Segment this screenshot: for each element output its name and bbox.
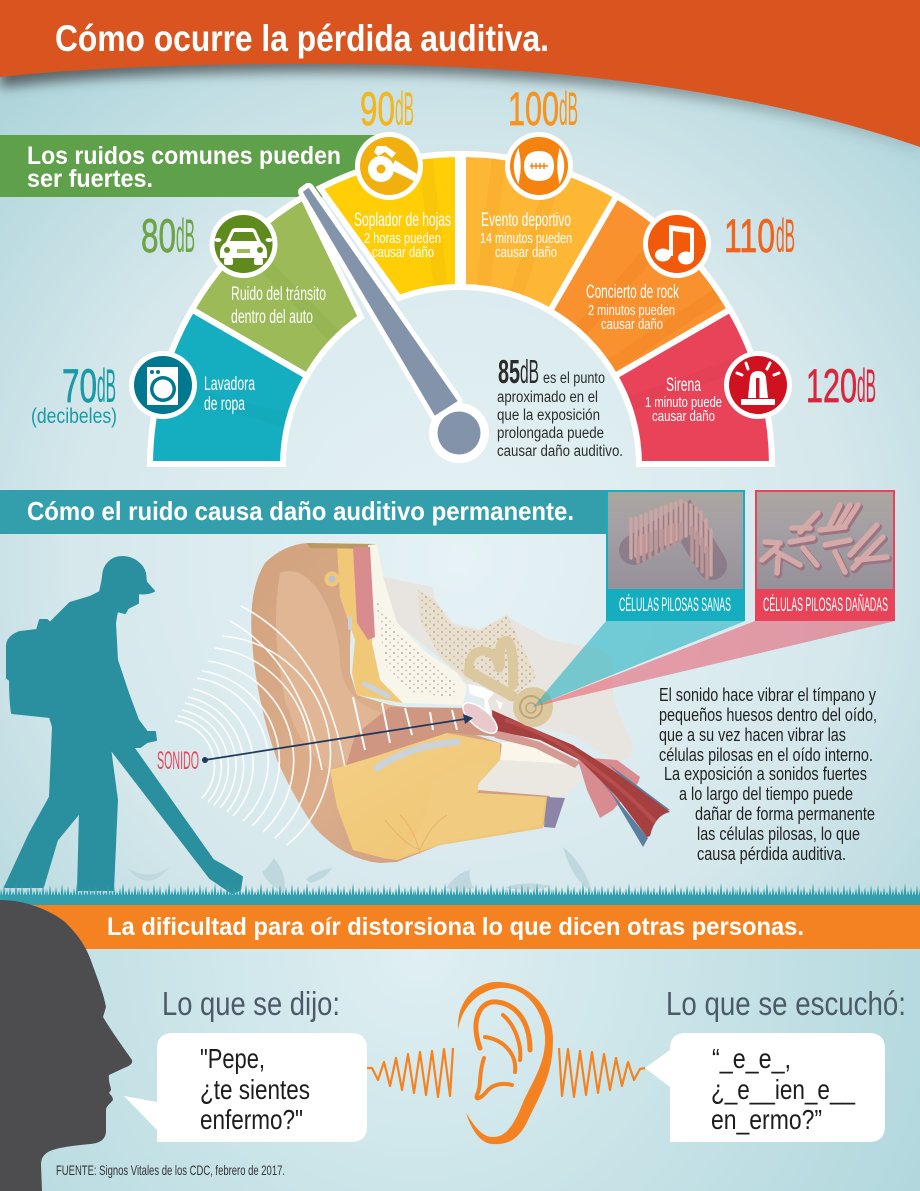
gauge (150, 150, 772, 465)
ear: pink tissue (577, 757, 640, 818)
label: rock concert: 2 minutos pueden (588, 303, 675, 319)
section heading: hearing difficulty (0, 905, 920, 949)
explanatory text: causa pérdida auditiva. (697, 844, 846, 864)
110 dB label: 110 (724, 209, 775, 262)
segment labels (204, 210, 722, 425)
panel: damaged hair cells (755, 490, 895, 621)
source note: FUENTE: Signos Vitales de los CDC, febrero de 2017. (56, 1162, 285, 1178)
ear: outer tan body (251, 543, 550, 863)
label: siren: 1 minuto puede (645, 395, 722, 411)
85 dB note: que la exposición (497, 407, 600, 424)
zoom beam: healthy cells (533, 621, 745, 707)
ear: yellow cartilage strip (337, 546, 403, 703)
segment 120 dB (615, 310, 772, 464)
dB labels: dB (776, 209, 795, 262)
segment 90 dB (320, 154, 458, 298)
ear: eardrum (458, 698, 502, 738)
dB labels: dB (395, 82, 414, 135)
label: leaf blower: Soplador de hojas (354, 210, 451, 231)
explanatory text: células pilosas en el oído interno. (659, 745, 873, 765)
ear: spongy bone (418, 590, 537, 693)
ear: grey cartilage (377, 742, 457, 768)
explanatory text: que a su vez hacen vibrar las (659, 725, 846, 745)
section heading: common noises: ser fuertes. (27, 165, 153, 193)
85 dB note: 85 (498, 353, 520, 390)
segment 80 dB (192, 197, 361, 376)
ear: ossicles (468, 684, 503, 717)
faint falling leaves (128, 847, 592, 892)
label: sports event: causar daño (495, 245, 557, 261)
ear: blue vessel (593, 770, 648, 847)
70 dB label (31, 359, 117, 428)
speech bubble: heard (645, 1033, 885, 1142)
label: sports event: 14 minutos pueden (480, 231, 572, 247)
icon: car (210, 210, 278, 278)
label: sports event (480, 210, 572, 261)
explanatory text (659, 685, 877, 864)
80 dB label: 80 (141, 209, 176, 262)
damaged cells bundle (762, 505, 888, 575)
label: traffic: dentro del auto (231, 307, 313, 328)
ear: lower yellow lobe (330, 733, 547, 860)
label: rock concert: Concierto de rock (586, 282, 679, 303)
text: dB (857, 359, 876, 412)
icon: washing machine (129, 351, 197, 419)
section heading: how noise causes damage (0, 490, 606, 534)
label: washer: de ropa (204, 394, 245, 415)
speech bubble: said (124, 1033, 367, 1142)
section heading: common noises (0, 135, 382, 197)
speech bubble: heard: en_ermo?” (711, 1104, 822, 1135)
85 dB note: dB (520, 353, 539, 390)
label: washer (204, 374, 255, 415)
section heading: hearing difficulty: La dificultad para oír distorsiona lo que dicen otras personas. (107, 913, 804, 941)
segment light rays (170, 150, 750, 465)
sound wave left (367, 1048, 453, 1097)
healthy cells bundle (631, 501, 712, 578)
ear: small cartilage ring (324, 572, 340, 586)
label: siren: Sirena (666, 375, 701, 396)
grass (0, 880, 920, 906)
ear: lower white bone (478, 742, 583, 797)
section heading: how noise causes damage: Cómo el ruido causa daño auditivo permanente. (27, 496, 574, 526)
icon: siren (724, 351, 792, 419)
label: traffic: Ruido del tránsito (231, 284, 326, 305)
label: traffic (231, 284, 326, 328)
panel: healthy hair cells: CÉLULAS PILOSAS SANAS (619, 595, 731, 616)
text: SONIDO (157, 747, 199, 775)
label: siren: causar daño (652, 409, 715, 425)
segment 100 dB (463, 154, 616, 311)
explanatory text: La exposición a sonidos fuertes (664, 764, 867, 784)
90 dB label: 90 (360, 82, 395, 135)
label: rock concert: causar daño (601, 317, 663, 333)
120 dB label: 120 (806, 359, 857, 412)
explanatory text: las células pilosas, lo que (697, 824, 860, 844)
ear: concha highlight (276, 571, 440, 770)
icon: musical note (643, 210, 711, 278)
100 dB label: 100 (508, 82, 559, 135)
ear: red eustachian tube (492, 710, 670, 837)
icon: leaf blower (355, 132, 423, 200)
label: sports event: Evento deportivo (481, 210, 571, 231)
ear: purple tissue (544, 797, 565, 828)
speech bubble: heard: “_e_e_, (712, 1043, 791, 1074)
segment 70 dB (150, 310, 307, 464)
ear: canal tissue (345, 707, 500, 770)
ear cross-section illustration (175, 543, 670, 863)
section heading: common noises: Los ruidos comunes pueden (27, 142, 341, 170)
sound wave arcs (175, 606, 457, 845)
85 dB note: aproximado en el (497, 389, 598, 406)
85 dB note: es el punto (543, 370, 605, 387)
icon: orange ear (458, 982, 553, 1144)
85 dB note: prolongada puede (497, 425, 604, 442)
panel: healthy hair cells (606, 490, 745, 621)
label: leaf blower: 2 horas pueden (364, 231, 441, 247)
head silhouette (0, 900, 132, 1191)
pointer: sound to eardrum (202, 714, 473, 763)
label: washer: Lavadora (204, 374, 255, 395)
title: Cómo ocurre la pérdida auditiva. (55, 18, 549, 59)
worker silhouette with leaf blower (5, 557, 242, 893)
speech bubble: said: ¿te sientes (200, 1074, 310, 1105)
dB labels: dB (176, 209, 195, 262)
85 dB note (497, 353, 623, 460)
ear: cochlea and canals (469, 641, 513, 696)
ear: pink muscle (353, 547, 375, 640)
70 dB label: (decibeles) (31, 405, 117, 428)
70 dB label: 70 (62, 359, 97, 412)
label: leaf blower: causar daño (372, 245, 434, 261)
speech bubble: heard: ¿_e__ien_e__ (711, 1074, 855, 1105)
ear: grey-white back bone (383, 577, 633, 762)
dB labels (31, 82, 876, 428)
segment 110 dB (550, 196, 730, 376)
label: leaf blower (354, 210, 451, 261)
dB labels: dB (559, 82, 578, 135)
ear: white bone with marrow (368, 544, 467, 705)
zoom beam: damaged cells (533, 621, 895, 707)
label: rock concert (586, 282, 679, 333)
explanatory text: dañar de forma permanente (695, 804, 875, 824)
header band (0, 0, 920, 153)
segment white borders (150, 154, 772, 464)
dB labels: dB (97, 359, 116, 412)
heading: what was said: Lo que se dijo: (162, 985, 340, 1022)
icon: football (505, 132, 573, 200)
85 dB note: causar daño auditivo. (497, 443, 623, 460)
explanatory text: a lo largo del tiempo puede (679, 784, 853, 804)
sound wave right (559, 1048, 645, 1097)
label: siren (645, 375, 722, 425)
needle (304, 188, 489, 463)
speech bubble: said: enfermo?" (200, 1104, 303, 1135)
speech bubble: said: "Pepe, (200, 1043, 265, 1074)
